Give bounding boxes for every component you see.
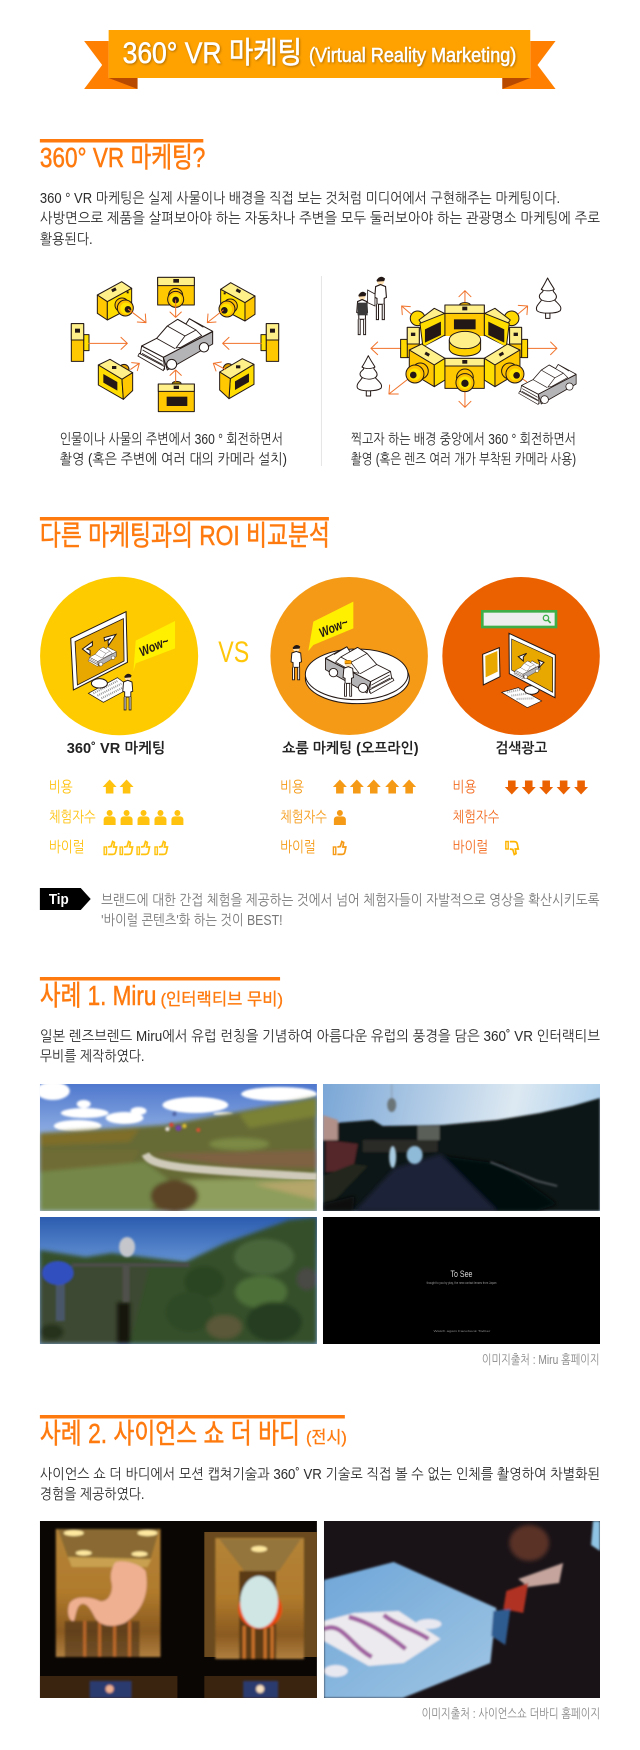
- title text: 360° VR 마케팅: [123, 37, 302, 70]
- body: 일본 렌즈브렌드 Miru에서 유럽 런칭을 기념하여 아름다운 유럽의 풍경을 담은 360˚ VR 인터랙티브: [40, 1028, 600, 1045]
- circle: search ad: [442, 577, 600, 735]
- small car: [519, 364, 576, 405]
- illustration: search ad: [482, 611, 556, 708]
- customers: [291, 645, 301, 680]
- photo: child and body projection table: [324, 1521, 600, 1698]
- monitor: [524, 686, 539, 694]
- comparison labels: 360˚ VR 마케팅: [67, 740, 165, 757]
- VS: VS: [218, 636, 249, 669]
- comparison labels: [67, 740, 548, 757]
- metrics: search ad: 바이럴: [453, 839, 488, 856]
- heading: 사례 1. Miru: [40, 980, 156, 1011]
- metrics: search ad: 체험자수: [453, 809, 499, 826]
- ribbon right fold: [502, 78, 530, 89]
- tip text: [101, 892, 600, 929]
- ribbon left fold: [109, 78, 138, 89]
- body: [40, 1028, 600, 1065]
- body: 무비를 제작하였다.: [40, 1049, 145, 1065]
- metrics: showroom: 체험자수: [280, 809, 327, 826]
- search box: [482, 611, 556, 627]
- tip callout: Tip: [49, 891, 69, 908]
- person: [123, 674, 133, 710]
- image credit: Science Show: 이미지출처 : 사이언스쇼 더바디 홈페이지: [422, 1706, 600, 1721]
- keyboard: [502, 688, 542, 708]
- captions under illustrations: 찍고자 하는 배경 중앙에서 360 ° 회전하면서: [351, 431, 576, 448]
- car: [138, 319, 213, 371]
- metrics: 360 VR: 비용: [49, 779, 73, 796]
- wow text: Wow~: [317, 614, 350, 640]
- section: case 1 Miru: (인터랙티브 무비): [160, 990, 283, 1009]
- body: 사이언스 쇼 더 바디에서 모션 캡쳐기술과 360˚ VR 기술로 직접 볼 수 없는 인체를 촬영하여 차별화된: [40, 1466, 600, 1483]
- metrics: 360 VR: [49, 779, 183, 856]
- heading: 사례 2. 사이언스 쇼 더 바디: [40, 1418, 300, 1449]
- speech bubble: [133, 621, 175, 672]
- rig: back cameras: [401, 303, 528, 358]
- ribbon right tail: [502, 41, 556, 89]
- circle: showroom marketing: [270, 577, 428, 735]
- metrics: search ad: [453, 779, 588, 856]
- captions under illustrations: 촬영 (혹은 주변에 여러 대의 카메라 설치): [60, 452, 287, 468]
- ribbon body: [109, 30, 530, 78]
- photo: valley with balloons: [40, 1217, 317, 1344]
- captions under illustrations: [60, 431, 576, 468]
- arrows: [371, 291, 557, 407]
- tip callout: [40, 888, 600, 929]
- metrics: showroom: 바이럴: [280, 839, 316, 856]
- illustration: showroom: [291, 602, 409, 704]
- photo: stomach hologram exhibit: [40, 1521, 317, 1698]
- curved arrows: [82, 642, 92, 655]
- section: case 2 Science Show: (전시): [306, 1428, 347, 1447]
- illustration: cameras around car: [71, 277, 279, 412]
- wow text: Wow~: [137, 633, 171, 659]
- title text: (Virtual Reality Marketing): [309, 45, 516, 67]
- divider: [320, 276, 323, 466]
- rig: front cameras: [406, 344, 524, 392]
- screen car: [514, 661, 540, 679]
- section: case 2 Science Show: [40, 1415, 600, 1503]
- metrics: showroom: [280, 779, 416, 856]
- tablet: [483, 648, 500, 685]
- metrics: search ad: 비용: [453, 779, 476, 796]
- section: case 1 Miru: [40, 977, 600, 1065]
- captions under illustrations: 촬영 (혹은 렌즈 여러 개가 부착된 카메라 사용): [351, 451, 576, 468]
- photo: To See end screen: [323, 1217, 600, 1344]
- photo: To See end screen: To See: [451, 1269, 472, 1279]
- trees: [357, 278, 561, 396]
- body: [40, 1466, 600, 1503]
- comparison labels: 쇼룸 마케팅 (오프라인): [282, 740, 419, 757]
- intro paragraph: 사방면으로 제품을 살펴보아야 하는 자동차나 주변을 모두 둘러보아야 하는 관광명소 마케팅에 주로: [40, 210, 600, 227]
- car on platform: [325, 647, 394, 694]
- metrics: showroom: 비용: [280, 779, 304, 796]
- comparison labels: 검색광고: [495, 740, 548, 757]
- arrows: [89, 300, 261, 382]
- photo: To See end screen: thought to you by play, the new contact lenses from Japan: [427, 1281, 496, 1285]
- metrics: 360 VR: 바이럴: [49, 839, 85, 856]
- section: 360 VR marketing intro: [40, 139, 600, 248]
- circle: 360 VR marketing: [40, 577, 198, 735]
- intro paragraph: 활용된다.: [40, 232, 93, 248]
- photo: river bridge at dusk: [322, 1084, 600, 1211]
- title text: [123, 37, 516, 70]
- speech bubble: [308, 602, 353, 651]
- metrics: 360 VR: 체험자수: [49, 809, 96, 826]
- photo: To See end screen: Watch again Facebook Twitter: [434, 1329, 490, 1333]
- illustration: VR monitor: [71, 612, 175, 710]
- tip text: '바이럴 콘텐츠'화 하는 것이 BEST!: [101, 912, 283, 929]
- people: [357, 277, 386, 335]
- title ribbon: [84, 30, 556, 89]
- small car on screen: [88, 647, 116, 667]
- intro paragraph: 360 ° VR 마케팅은 실제 사물이나 배경을 직접 보는 것처럼 미디어에서 구현해주는 마케팅이다.: [40, 190, 560, 207]
- intro paragraph: [40, 190, 600, 248]
- tip badge: [40, 888, 91, 910]
- heading: 360° VR 마케팅?: [40, 142, 205, 173]
- photo: hillside with balloons: [40, 1084, 317, 1211]
- cameras: [71, 277, 279, 412]
- body: 경험을 제공하였다.: [40, 1486, 145, 1503]
- image credit: Miru: 이미지출처 : Miru 홈페이지: [482, 1352, 600, 1367]
- ribbon left tail: [84, 41, 138, 89]
- magnifier: [543, 615, 551, 623]
- rig: floor and central cylinder: [422, 331, 508, 359]
- keyboard: [88, 678, 131, 702]
- section heading: ROI comparison: 다른 마케팅과의 ROI 비교분석: [40, 520, 330, 551]
- illustration: camera rig in centre: [357, 277, 576, 407]
- monitor: [91, 679, 107, 688]
- screen arrows: [518, 653, 527, 661]
- captions under illustrations: 인물이나 사물의 주변에서 360 ° 회전하면서: [60, 432, 283, 448]
- platform: [305, 653, 409, 704]
